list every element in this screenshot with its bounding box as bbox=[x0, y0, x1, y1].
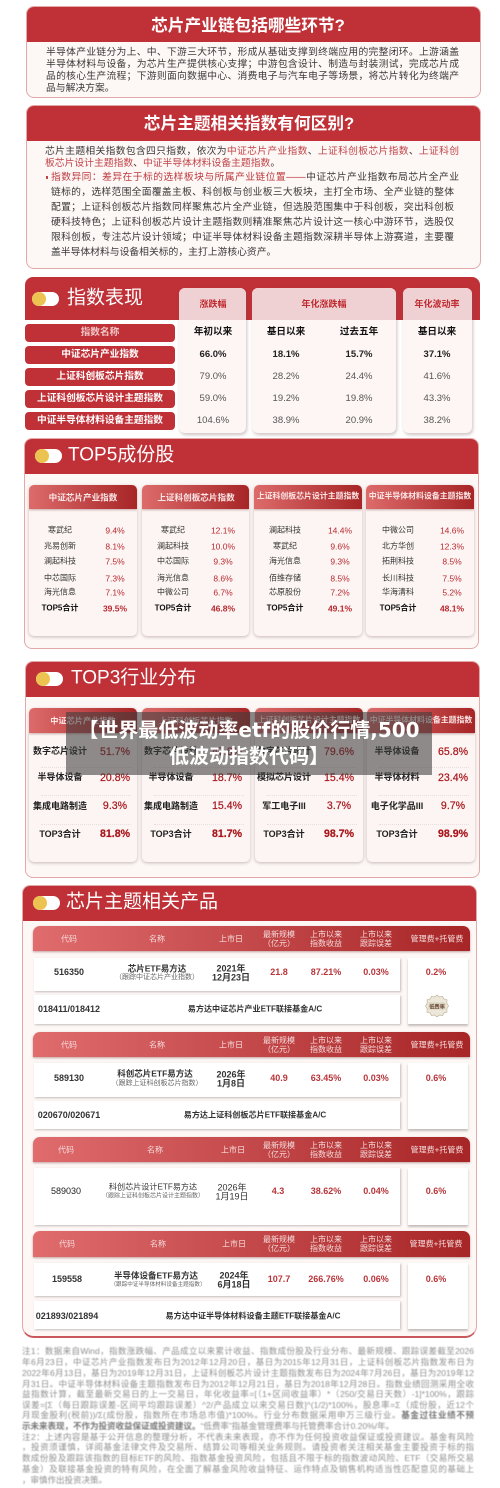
product group: 589030: 最新规模 bbox=[263, 1140, 295, 1150]
product group: 589130: 名称 bbox=[149, 1040, 165, 1049]
column: annualized change: 20.9% bbox=[346, 415, 372, 426]
panel: index performance bbox=[25, 277, 480, 320]
column: annualized change: 年化涨跌幅 bbox=[301, 299, 347, 309]
text block: similarities and differences: 指数异同：差异在于标的选样板块与所属产业链位置——中证芯片产业指数布局芯片全产业 bbox=[51, 172, 459, 183]
overlay title banner bbox=[66, 712, 432, 775]
product group: 516350: 87.21% bbox=[311, 967, 341, 977]
column: change: 年初以来 bbox=[194, 327, 232, 338]
product group: 516350: 0.2% bbox=[426, 967, 446, 977]
product group: 589030: 科创芯片设计ETF易方达 bbox=[109, 1183, 197, 1192]
card: STAR chip top 5: 寒武纪 bbox=[161, 526, 185, 535]
product group: 589030 bbox=[32, 1136, 472, 1228]
card: semiconductor materials top 3: TOP3合计 bbox=[376, 829, 418, 839]
card: semiconductor materials top 5: 北方华创 bbox=[382, 542, 414, 551]
panel: index differences bbox=[26, 105, 481, 269]
product group: 589130: 上市以来 bbox=[360, 1036, 392, 1044]
column: annualized volatility: 年化波动率 bbox=[414, 299, 460, 309]
panel header band bbox=[22, 885, 477, 921]
product group: 159558: 107.7 bbox=[268, 1274, 290, 1284]
card: CSI chip industry top 5: 兆易创新 bbox=[44, 542, 76, 551]
row labels: index names: 上证科创板芯片指数 bbox=[56, 371, 144, 382]
card: CSI chip industry top 5: 9.4% bbox=[105, 525, 125, 535]
icon: low fee seal bbox=[425, 994, 449, 1018]
product group: 159558: 上市日 bbox=[222, 1240, 246, 1248]
card: semiconductor materials top 5: 拓荆科技 bbox=[382, 557, 414, 566]
card: semiconductor materials top 3 bbox=[367, 708, 475, 862]
card: STAR chip top 3: 47.6% bbox=[212, 746, 242, 758]
product group: 589030: 跟踪误差 bbox=[360, 1150, 392, 1158]
overlay title banner: 【世界最低波动率etf的股价行情,500 bbox=[78, 718, 420, 742]
footnotes: 月现金股利(税前))/Σ(成份股，指数所在市场总市值)*100%。行业分布数据采用申万三级行业。基金过往业绩不预 bbox=[22, 1410, 474, 1420]
panel: industry chain bbox=[26, 6, 481, 98]
card: CSI chip industry top 5: 7.5% bbox=[105, 556, 125, 566]
card: CSI chip industry top 5: 中芯国际 bbox=[44, 574, 76, 583]
product group: 589130: 2026年 bbox=[216, 1069, 246, 1079]
column: annualized change: 18.1% bbox=[273, 349, 299, 360]
product group: 589030: 2026年 bbox=[217, 1182, 247, 1192]
footnotes: 误差=[Σ（每日跟踪误差-区间平均跟踪误差）^2/产品成立以来交易日数]^(1/2)*100%，股息率=Σ（成份股，近12个 bbox=[22, 1400, 474, 1410]
card: CSI chip industry top 5: 澜起科技 bbox=[44, 557, 76, 566]
card: STAR chip top 5: 12.1% bbox=[211, 525, 235, 535]
card: semiconductor materials top 3: 65.8% bbox=[438, 746, 468, 758]
product group: 589130: 589130 bbox=[54, 1073, 84, 1083]
card: CSI chip industry top 3: TOP3合计 bbox=[39, 829, 81, 839]
footnotes: ，投资须谨慎，详阅基金法律文件及交易所、结算公司等相关业务规则。请投资者关注相关基金主要投资于标的指 bbox=[22, 1442, 474, 1452]
card: semiconductor materials top 5 bbox=[366, 485, 474, 636]
card: CSI chip industry top 5: 8.1% bbox=[105, 541, 125, 551]
product group: 516350: 跟踪误差 bbox=[360, 938, 392, 948]
product group: 589130: 跟踪误差 bbox=[360, 1044, 392, 1054]
product group: 516350: 12月23日 bbox=[212, 972, 250, 982]
card: STAR chip top 3 bbox=[142, 708, 250, 862]
product group: 589030: 38.62% bbox=[311, 1186, 341, 1196]
card: STAR chip design top 5: 49.1% bbox=[328, 603, 352, 613]
card: CSI chip industry top 3: 20.8% bbox=[100, 772, 130, 784]
card: semiconductor materials top 5: 华海清科 bbox=[382, 588, 414, 597]
card: STAR chip design top 5: 芯原股份 bbox=[269, 588, 301, 597]
card: CSI chip industry top 3: 中证芯片产业指数 bbox=[50, 716, 116, 725]
card: semiconductor materials top 3: 中证半导体材料设备主题指数 bbox=[370, 716, 472, 725]
footnotes: 数成份股及跟踪该指数的目标ETF的风险、指数基金投资风险，包括且不限于标的指数波动风险、ETF（交易所交易 bbox=[22, 1453, 474, 1463]
product group: 159558: 2024年 bbox=[219, 1270, 249, 1280]
row labels: index names: 指数名称 bbox=[81, 327, 119, 338]
card: STAR chip top 5: 上证科创板芯片指数 bbox=[157, 492, 235, 502]
column: change bbox=[179, 288, 246, 433]
card: STAR chip design top 3: 15.4% bbox=[324, 772, 354, 784]
column: annualized change: 28.2% bbox=[273, 371, 299, 382]
product group: 589130: 管理费+托管费 bbox=[411, 1040, 463, 1049]
product group: 516350: 上市以来 bbox=[360, 930, 392, 938]
footnotes: 月31日。中证半导体材料设备主题指数发布日为2012年12月21日，基日为2018年12月28日。指数业绩回测采用全收 bbox=[22, 1379, 474, 1389]
card: semiconductor materials top 5: 8.5% bbox=[442, 556, 462, 566]
product group: 589130: 科创芯片ETF易方达 bbox=[117, 1068, 193, 1078]
card: CSI chip industry top 3: 9.3% bbox=[103, 800, 127, 812]
text block: index intro: 芯片主题相关指数包含四只指数，依次为中证芯片产业指数、上证科创板芯片指数、上证科创 bbox=[45, 146, 459, 157]
card: STAR chip design top 3: 上证科创板芯片设计主题指数 bbox=[258, 716, 360, 725]
card: CSI chip industry top 5: 7.1% bbox=[105, 587, 125, 597]
product group: 516350: 516350 bbox=[54, 967, 84, 977]
card: semiconductor materials top 3: 半导体设备 bbox=[374, 746, 420, 756]
card: STAR chip top 5 bbox=[142, 485, 249, 636]
product group: 516350: 代码 bbox=[61, 934, 77, 943]
text block: industry chain: 品与解决方案。 bbox=[46, 83, 115, 94]
card: STAR chip top 5: 海光信息 bbox=[157, 574, 189, 583]
card: CSI chip industry top 3: 51.7% bbox=[100, 746, 130, 758]
product group: 159558: 6月18日 bbox=[217, 1280, 251, 1290]
product group: 589130: 上市日 bbox=[219, 1040, 243, 1049]
heading: industry chain: 芯片产业链包括哪些环节? bbox=[151, 16, 345, 35]
text block: similarities and differences: 硬科技特色；上证科创板芯片设计主题指数则精准聚焦芯片设计这一核心中游环节，选股仅 bbox=[51, 217, 454, 228]
panel header band bbox=[26, 105, 481, 141]
product group: 589130: 指数收益 bbox=[310, 1044, 342, 1054]
product group: 589030: 0.6% bbox=[426, 1186, 446, 1196]
panel: top 5 holdings bbox=[24, 438, 479, 649]
product group: 589030: 上市以来 bbox=[310, 1140, 342, 1150]
card: STAR chip top 5: 9.3% bbox=[213, 556, 233, 566]
card: STAR chip design top 5: 海光信息 bbox=[269, 557, 301, 566]
card: STAR chip top 3: 数字芯片设计 bbox=[144, 746, 198, 756]
heading: top 5 holdings: TOP5成份股 bbox=[68, 445, 174, 466]
text block: industry chain: 半导体材料与设备，为芯片生产提供核心支撑；中游包含设计、制造与封装测试，完成芯片成 bbox=[46, 59, 459, 70]
product group: 589130: 易方达上证科创板芯片ETF联接基金A/C bbox=[184, 1111, 326, 1120]
product group: 589130: （亿元） bbox=[263, 1044, 295, 1054]
card: CSI chip industry top 3: 集成电路制造 bbox=[33, 801, 87, 811]
column: annualized change bbox=[252, 288, 396, 433]
card: semiconductor materials top 5: 48.1% bbox=[440, 603, 464, 613]
icon: toggle, top 5 bbox=[35, 449, 62, 463]
card: CSI chip industry top 3: 数字芯片设计 bbox=[33, 746, 87, 756]
panel header band bbox=[26, 6, 481, 42]
product group: 516350: 0.03% bbox=[363, 967, 389, 977]
card: STAR chip top 5: 中芯国际 bbox=[157, 557, 189, 566]
product group: 516350: 名称 bbox=[149, 934, 165, 943]
panel header band bbox=[24, 438, 479, 474]
icon: low fee seal: 低费率 bbox=[429, 1002, 445, 1010]
product group: 516350: 2021年 bbox=[216, 963, 246, 973]
product group: 159558: 半导体设备ETF易方达 bbox=[114, 1270, 198, 1280]
row labels: index names: 中证芯片产业指数 bbox=[61, 349, 139, 360]
card: semiconductor materials top 3: 电子化学品III bbox=[371, 801, 423, 811]
product group: 589030: 上市以来 bbox=[360, 1140, 392, 1150]
row labels: index names: 上证科创板芯片设计主题指数 bbox=[37, 393, 163, 404]
card: CSI chip industry top 5: 39.5% bbox=[103, 603, 127, 613]
icon: toggle, products bbox=[33, 896, 60, 910]
card: STAR chip design top 5: 寒武纪 bbox=[273, 542, 297, 551]
card: CSI chip industry top 3: 半导体设备 bbox=[37, 772, 83, 782]
card: semiconductor materials top 5: 中证半导体材料设备主题指数 bbox=[369, 492, 471, 501]
card: STAR chip top 3: 18.7% bbox=[212, 772, 242, 784]
product group: 516350: 018411/018412 bbox=[38, 1004, 100, 1014]
row labels: index names: 中证半导体材料设备主题指数 bbox=[37, 415, 163, 426]
product group: 589030: 4.3 bbox=[272, 1186, 284, 1196]
product group: 589130: 0.03% bbox=[363, 1073, 389, 1083]
card: STAR chip design top 5: 8.5% bbox=[330, 573, 350, 583]
product group: 589130: 最新规模 bbox=[263, 1036, 295, 1044]
footnotes: 注1：数据来自Wind，指数涨跌幅、产品成立以来累计收益、指数成份股及行业分布、最新规模、跟踪误差截至2026 bbox=[22, 1346, 474, 1356]
card: STAR chip design top 5: 佰维存储 bbox=[269, 574, 301, 583]
card: STAR chip top 5: 10.0% bbox=[211, 541, 235, 551]
text block: similarities and differences: 链标的，选样范围全面覆盖主板、科创板与创业板三大板块，主打全市场、全产业链的整体 bbox=[51, 187, 454, 198]
card: CSI chip industry top 5: 海光信息 bbox=[44, 588, 76, 597]
heading: related products: 芯片主题相关产品 bbox=[66, 892, 218, 913]
product group: 589030: 0.04% bbox=[363, 1186, 389, 1196]
column: annualized change: 19.8% bbox=[346, 392, 372, 403]
card: STAR chip design top 5: 澜起科技 bbox=[269, 526, 301, 535]
product group: 159558: 名称 bbox=[150, 1240, 166, 1248]
text block: industry chain: 品的核心生产流程；下游则面向数据中心、消费电子与汽车电子等场景，将芯片转化为终端产 bbox=[46, 71, 459, 82]
product group: 589130 bbox=[32, 1032, 472, 1132]
card: semiconductor materials top 5: 14.6% bbox=[440, 525, 464, 535]
card: STAR chip design top 3: 98.7% bbox=[324, 828, 354, 840]
footnotes bbox=[22, 1346, 474, 1485]
product group: 589130: 40.9 bbox=[270, 1073, 288, 1083]
column: annualized volatility: 43.3% bbox=[424, 392, 450, 403]
product group: 516350: （亿元） bbox=[263, 938, 295, 948]
product group: 589030: 1月19日 bbox=[215, 1192, 249, 1202]
text block: similarities and differences bbox=[46, 172, 459, 258]
column: annualized change: 过去五年 bbox=[340, 327, 378, 338]
card: STAR chip design top 5: 9.6% bbox=[330, 541, 350, 551]
column: annualized change: 基日以来 bbox=[267, 327, 305, 338]
product group: 589130: 0.6% bbox=[426, 1073, 446, 1083]
card: STAR chip top 3: 15.4% bbox=[212, 800, 242, 812]
card: STAR chip design top 5: 7.2% bbox=[330, 587, 350, 597]
product group: 159558: 代码 bbox=[59, 1240, 75, 1248]
product group: 159558: 0.06% bbox=[363, 1274, 389, 1284]
card: STAR chip design top 3: 79.6% bbox=[324, 746, 354, 758]
card: CSI chip industry top 5: TOP5合计 bbox=[42, 604, 78, 613]
product group: 159558: 021893/021894 bbox=[36, 1311, 98, 1321]
text block: similarities and differences: 盖半导体材料与设备相关标的，主打上游核心资产。 bbox=[51, 247, 276, 258]
product group: 159558: 易方达中证半导体材料设备主题ETF联接基金A/C bbox=[166, 1312, 340, 1321]
card: semiconductor materials top 5: TOP5合计 bbox=[380, 604, 416, 613]
footnotes: 益指数计算，截至最新交易日的上一交易日，年化收益率=[（1+区间收益率）*（250/交易日天数）-1]*100%，跟踪 bbox=[22, 1389, 474, 1399]
product group: 589130: 020670/020671 bbox=[38, 1110, 100, 1120]
card: semiconductor materials top 3: 半导体材料 bbox=[374, 772, 420, 782]
product group: 159558: 266.76% bbox=[308, 1274, 344, 1284]
heading: index performance: 指数表现 bbox=[67, 288, 143, 309]
card: semiconductor materials top 5: 5.2% bbox=[442, 587, 462, 597]
product group: 159558: 159558 bbox=[52, 1274, 82, 1284]
card: CSI chip industry top 3 bbox=[29, 708, 137, 862]
footnotes: 年6月23日，中证芯片产业指数发布日为2012年12月20日，基日为2015年12月31日，上证科创板芯片指数发布日为 bbox=[22, 1357, 474, 1367]
column: annualized change: 15.7% bbox=[346, 349, 372, 360]
card: semiconductor materials top 3: 9.7% bbox=[441, 800, 465, 812]
panel header band bbox=[25, 277, 480, 320]
product group: 516350 bbox=[32, 926, 472, 1027]
column: annualized volatility: 37.1% bbox=[424, 349, 450, 360]
product group: 516350: 易方达中证芯片产业ETF联接基金A/C bbox=[188, 1005, 322, 1014]
icon: toggle, top 3 bbox=[36, 672, 63, 686]
product group: 589130: 代码 bbox=[61, 1040, 77, 1049]
product group: 516350: 指数收益 bbox=[310, 938, 342, 948]
product group: 159558: 上市以来 bbox=[310, 1235, 342, 1244]
footnotes: ，审慎作出投资决策。 bbox=[22, 1475, 107, 1485]
icon: toggle, performance bbox=[32, 292, 59, 306]
card: STAR chip top 5: 中微公司 bbox=[157, 588, 189, 597]
product group: 159558: 跟踪误差 bbox=[360, 1244, 392, 1253]
card: STAR chip design top 3: 3.7% bbox=[327, 800, 351, 812]
text block: index intro: 板芯片设计主题指数、中证半导体材料设备主题指数。 bbox=[45, 158, 280, 169]
card: STAR chip top 5: TOP5合计 bbox=[155, 604, 191, 613]
table header bbox=[33, 926, 470, 951]
product group: 516350: 上市以来 bbox=[310, 930, 342, 938]
table header bbox=[33, 1137, 470, 1162]
column: annualized change: 19.2% bbox=[273, 392, 299, 403]
card: STAR chip design top 3: TOP3合计 bbox=[263, 829, 305, 839]
panel header band bbox=[25, 661, 480, 697]
product group: 589030: （亿元） bbox=[263, 1150, 295, 1158]
row labels: index names bbox=[25, 324, 175, 430]
card: semiconductor materials top 3: 98.9% bbox=[438, 828, 468, 840]
card: STAR chip design top 5: 9.3% bbox=[330, 556, 350, 566]
card: STAR chip design top 5: 上证科创板芯片设计主题指数 bbox=[257, 492, 359, 501]
product group: 589030: 上市日 bbox=[221, 1145, 245, 1154]
product group: 159558: 0.6% bbox=[426, 1274, 446, 1284]
panel: related products bbox=[22, 885, 477, 1338]
product group: 589030: （跟踪上证科创板芯片设计主题指数） bbox=[102, 1194, 204, 1200]
card: CSI chip industry top 3: 81.8% bbox=[100, 828, 130, 840]
card: CSI chip industry top 5 bbox=[29, 485, 137, 636]
product group: 516350: 芯片ETF易方达 bbox=[128, 963, 186, 973]
card: STAR chip top 3: 集成电路制造 bbox=[144, 801, 198, 811]
product group: 589130: （跟踪上证科创板芯片指数） bbox=[112, 1080, 202, 1087]
footnotes: 注2：上述内容是基于公开信息的整理分析，不代表未来表现，亦不作为任何投资收益保证或投资建议。基金有风险 bbox=[22, 1432, 474, 1442]
card: STAR chip top 5: 46.8% bbox=[211, 603, 235, 613]
text block: industry chain bbox=[46, 46, 459, 94]
card: semiconductor materials top 3: 23.4% bbox=[438, 772, 468, 784]
card: semiconductor materials top 5: 7.5% bbox=[442, 573, 462, 583]
card: STAR chip design top 3: 数字芯片设计 bbox=[257, 746, 311, 756]
card: STAR chip design top 3: 军工电子III bbox=[262, 801, 306, 811]
card: semiconductor materials top 5: 中微公司 bbox=[382, 526, 414, 535]
product group: 589030: 指数收益 bbox=[310, 1150, 342, 1158]
card: CSI chip industry top 5: 7.3% bbox=[105, 573, 125, 583]
card: semiconductor materials top 5: 长川科技 bbox=[382, 574, 414, 583]
text block: similarities and differences: 配置；上证科创板芯片指数同样聚焦芯片全产业链，但选股范围集中于科创板，突出科创板 bbox=[51, 202, 454, 213]
text block: industry chain: 半导体产业链分为上、中、下游三大环节，形成从基础支撑到终端应用的完整闭环。上游涵盖 bbox=[46, 47, 459, 58]
card: STAR chip top 5: 6.7% bbox=[213, 587, 233, 597]
product group: 516350: （跟踪中证芯片产业指数） bbox=[115, 974, 199, 981]
product group: 589030: 管理费+托管费 bbox=[411, 1145, 463, 1154]
product group: 589030: 名称 bbox=[147, 1145, 163, 1154]
column: annualized change: 24.4% bbox=[346, 371, 372, 382]
product group: 159558: （跟踪中证半导体材料设备主题指数） bbox=[110, 1282, 206, 1288]
product group: 516350: 上市日 bbox=[219, 934, 243, 943]
column: change: 79.0% bbox=[200, 371, 226, 382]
column: change: 66.0% bbox=[200, 349, 226, 360]
product group: 516350: 管理费+托管费 bbox=[411, 934, 463, 943]
card: STAR chip top 3: 上证科创板芯片指数 bbox=[159, 716, 233, 725]
card: STAR chip top 3: 半导体设备 bbox=[148, 772, 194, 782]
card: STAR chip design top 3: 模拟芯片设计 bbox=[257, 772, 311, 782]
text block: index intro bbox=[45, 146, 459, 169]
card: CSI chip industry top 5: 寒武纪 bbox=[48, 526, 72, 535]
card: CSI chip industry top 5: 中证芯片产业指数 bbox=[49, 492, 117, 502]
heading: index differences: 芯片主题相关指数有何区别? bbox=[144, 114, 354, 133]
card: STAR chip top 5: 8.6% bbox=[213, 573, 233, 583]
product group: 589130: 上市以来 bbox=[310, 1036, 342, 1044]
card: STAR chip design top 5: TOP5合计 bbox=[267, 604, 303, 613]
column: annualized volatility: 38.2% bbox=[424, 415, 450, 426]
text block: similarities and differences: 限科创板，专注芯片设计领域；中证半导体材料设备主题指数深耕半导体上游赛道，主要覆 bbox=[51, 232, 454, 243]
column: annualized volatility: 基日以来 bbox=[418, 327, 456, 338]
panel: top 3 industries bbox=[25, 661, 480, 878]
card: STAR chip design top 5: 14.4% bbox=[328, 525, 352, 535]
product group: 159558: 上市以来 bbox=[360, 1235, 392, 1244]
card: STAR chip top 3: 81.7% bbox=[212, 828, 242, 840]
footnotes: 示未来表现，不作为投资收益保证或投资建议。“低费率”指基金管理费率与托管费率合计0.20%/年。 bbox=[22, 1421, 394, 1431]
footnotes: 基金）及联接基金投资的特有风险，在全面了解基金风险收益特征、运作特点及销售机构适当性匹配意见的基础上 bbox=[22, 1464, 474, 1474]
product group: 589030: 代码 bbox=[58, 1145, 74, 1154]
column: annualized volatility bbox=[403, 288, 472, 433]
product group: 589130: 63.45% bbox=[311, 1073, 341, 1083]
overlay title banner: 低波动指数代码】 bbox=[169, 744, 329, 768]
product group: 159558: 指数收益 bbox=[310, 1244, 342, 1253]
column: change: 59.0% bbox=[200, 392, 226, 403]
card: STAR chip top 3: TOP3合计 bbox=[150, 829, 192, 839]
product group: 159558: 最新规模 bbox=[263, 1235, 295, 1244]
product group: 159558 bbox=[32, 1230, 472, 1332]
product group: 516350: 21.8 bbox=[270, 967, 288, 977]
product group: 516350: 最新规模 bbox=[263, 930, 295, 938]
column: annualized volatility: 41.6% bbox=[424, 371, 450, 382]
table header bbox=[33, 1032, 470, 1057]
card: STAR chip design top 5 bbox=[254, 485, 362, 636]
footnotes: 2022年6月13日，基日为2019年12月31日，上证科创板芯片设计主题指数发布日为2024年7月26日，基日为2019年12 bbox=[22, 1368, 474, 1378]
column: change: 涨跌幅 bbox=[199, 299, 227, 309]
card: STAR chip top 5: 澜起科技 bbox=[157, 542, 189, 551]
card: STAR chip design top 3 bbox=[255, 708, 363, 862]
product group: 589030: 589030 bbox=[51, 1186, 81, 1196]
heading: top 3 industries: TOP3行业分布 bbox=[71, 668, 196, 689]
product group: 159558: 管理费+托管费 bbox=[410, 1240, 462, 1248]
card: semiconductor materials top 5: 12.3% bbox=[440, 541, 464, 551]
product group: 589130: 1月8日 bbox=[217, 1078, 245, 1088]
product group: 159558: （亿元） bbox=[263, 1244, 295, 1253]
column: change: 104.6% bbox=[197, 415, 229, 426]
table header bbox=[33, 1231, 470, 1257]
column: annualized change: 38.9% bbox=[273, 415, 299, 426]
